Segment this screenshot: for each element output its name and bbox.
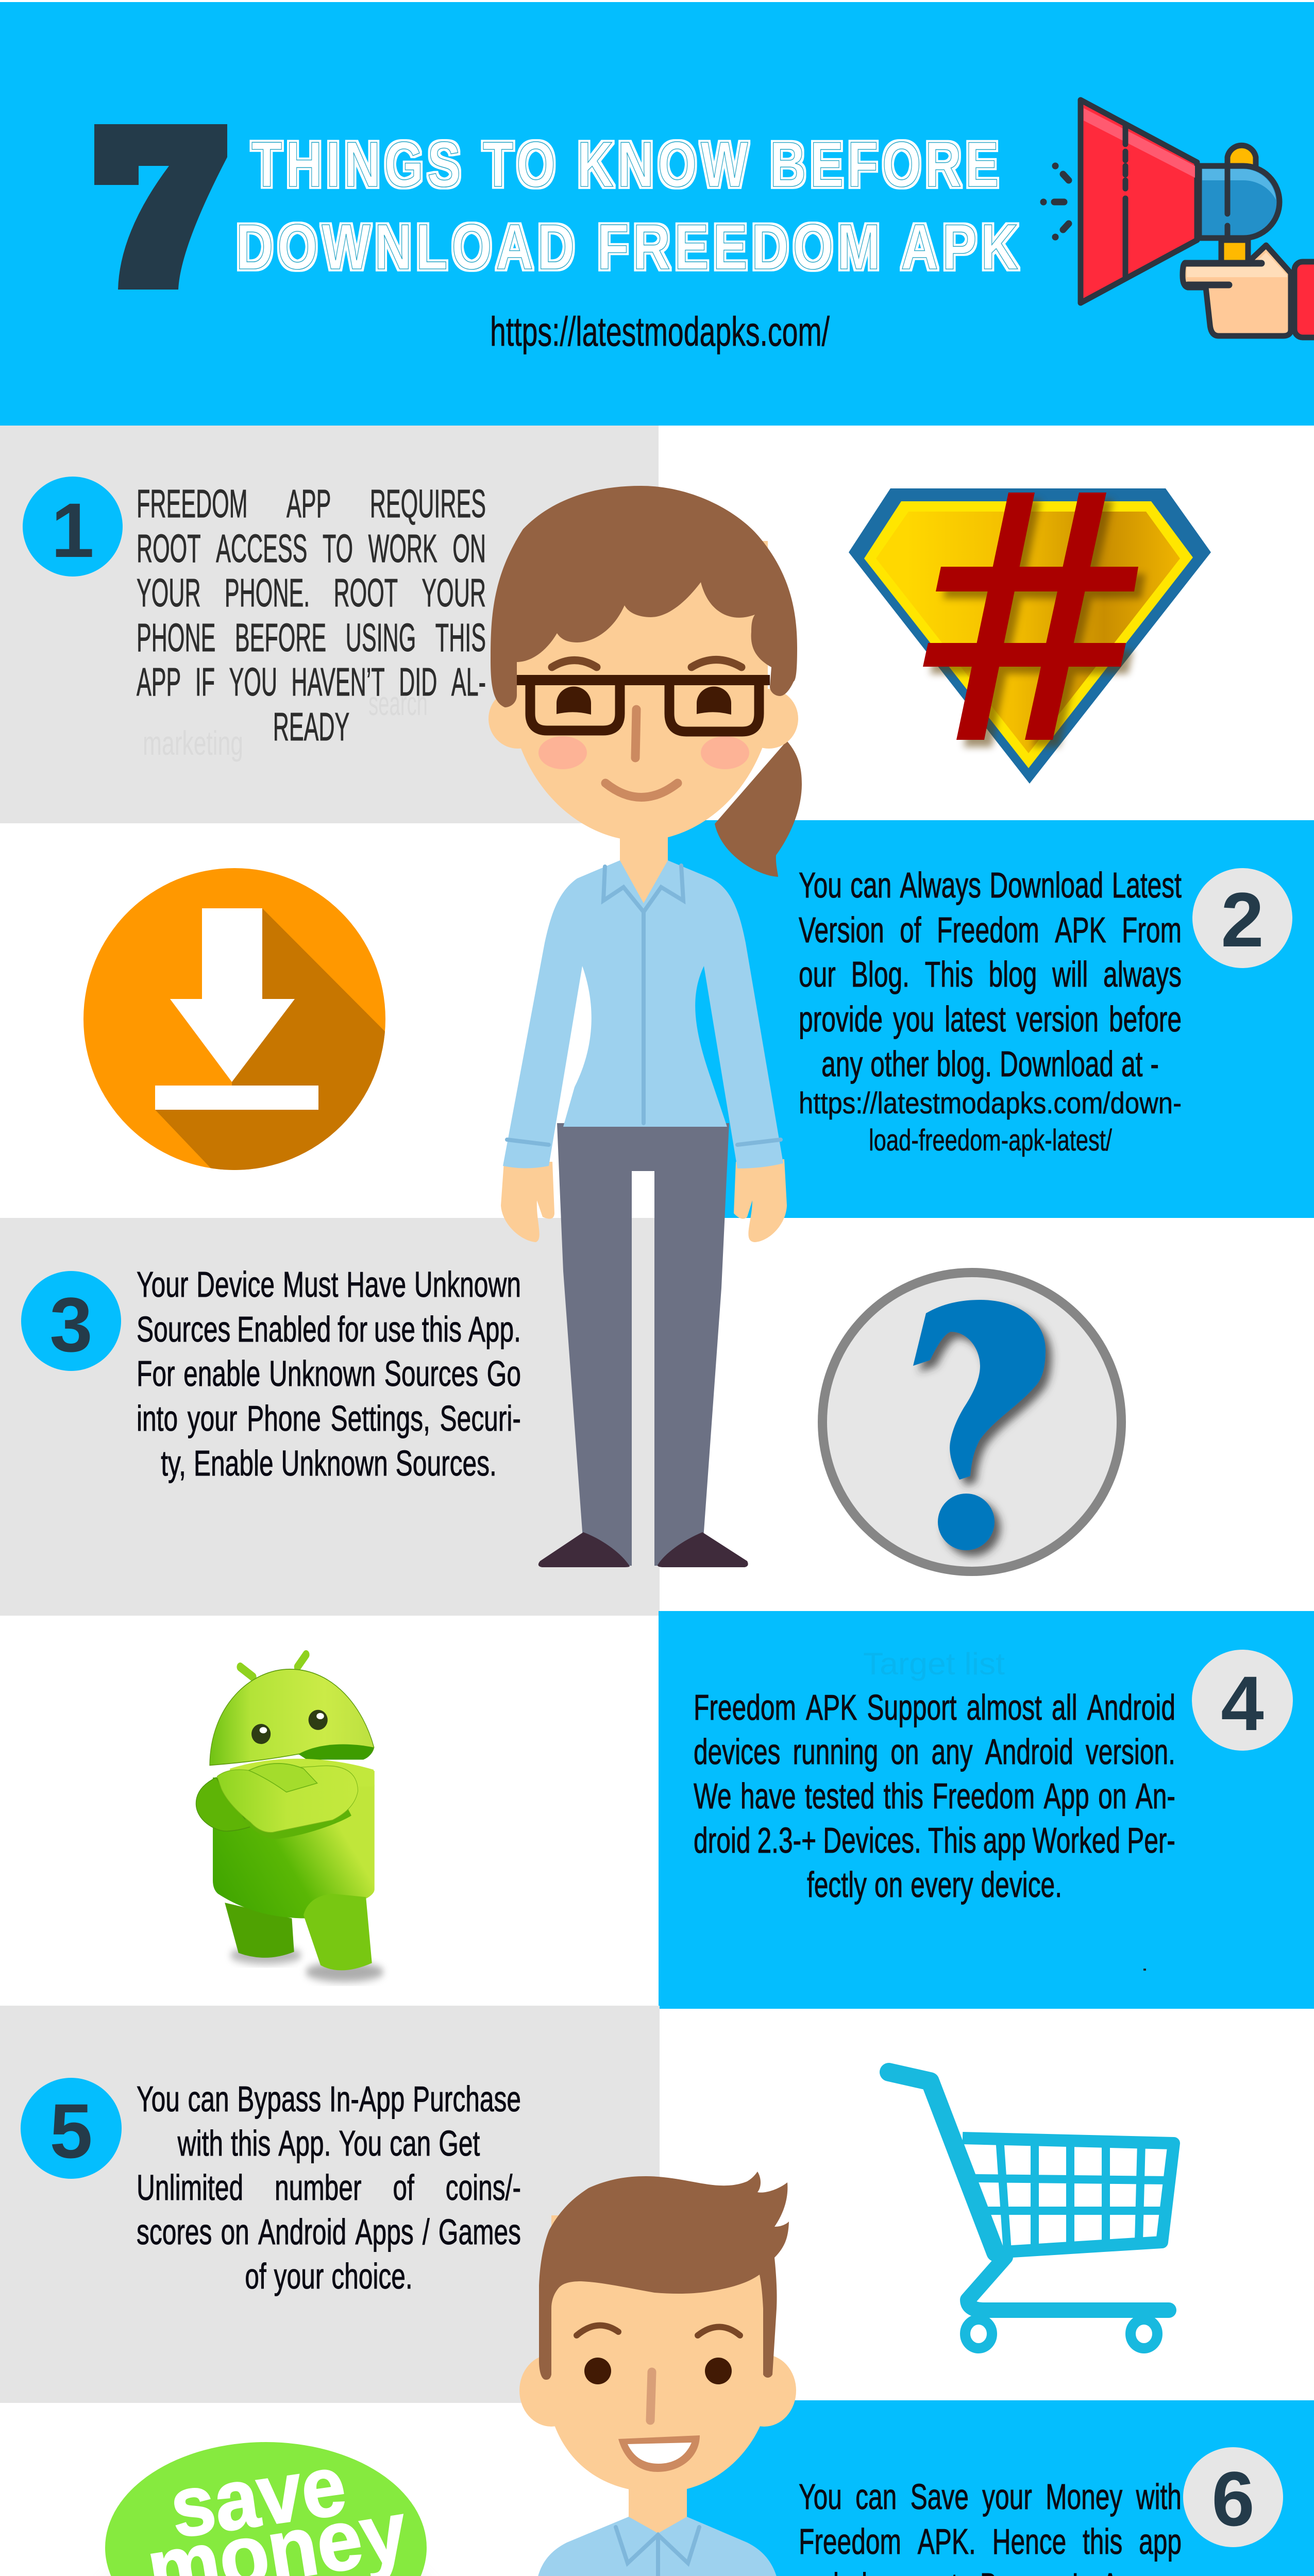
text block: item 6: APK. — [918, 2521, 976, 2562]
text block: item 4: version. — [1086, 1732, 1175, 1772]
text block: item 1: FREEDOM — [137, 482, 248, 526]
text block: item 6: this — [1083, 2521, 1122, 2562]
text block: item 1: PHONE. — [225, 571, 310, 615]
faint ghost words in item 1: search — [368, 684, 428, 722]
badge: number 6 — [1183, 2447, 1283, 2547]
text block: item 3: Device — [196, 1264, 275, 1304]
text block: item 3: use — [374, 1309, 415, 1349]
illustration: woman — [488, 486, 802, 1567]
download url lines: load-freedom-apk-latest/ — [869, 1124, 1113, 1157]
text block: item 1: DID — [399, 660, 437, 704]
text block: item 1: ACCESS — [216, 527, 307, 571]
icon: save money button — [89, 2437, 444, 2576]
panel: item 2 background — [659, 820, 1314, 1218]
text block: item 6: You — [799, 2477, 842, 2517]
text block: item 1: ROOT — [137, 527, 201, 571]
text block: item 3: Unknown — [281, 1443, 388, 1483]
text block: item 2: any — [821, 1044, 863, 1084]
text block: item 4: 2.3-+ — [757, 1820, 816, 1860]
text block: item 2: at — [1121, 1044, 1142, 1084]
badge: number 5: 5 — [49, 2088, 93, 2174]
text block: item 4: any — [932, 1732, 973, 1772]
text block: item 4: Android — [1087, 1687, 1175, 1727]
text block: item 5: choice. — [331, 2256, 413, 2296]
text block: item 3: Unknown — [269, 1353, 376, 1394]
text block: item 5: can — [188, 2079, 229, 2119]
faint ghost word in item 4: Target list — [863, 1647, 1005, 1681]
text block: item 4: Android — [985, 1732, 1073, 1772]
text block: item 4: An- — [1136, 1776, 1175, 1816]
icon: root hash shield — [849, 488, 1211, 784]
text block: item 4: on — [890, 1732, 919, 1772]
text block: item 2: other — [870, 1044, 929, 1084]
text block: item 3: into — [137, 1398, 178, 1438]
text block: item 3 — [137, 1262, 521, 1486]
text block: item 6: your — [982, 2477, 1032, 2517]
text block: item 4: have — [740, 1776, 796, 1816]
icon: shopping cart — [889, 2072, 1174, 2348]
text block: item 5: You — [137, 2079, 180, 2119]
text block: item 5: scores — [137, 2212, 212, 2252]
text block: item 4: app — [983, 1820, 1026, 1860]
text block: item 5: number — [275, 2167, 361, 2208]
text block: item 1: REQUIRES — [370, 482, 486, 526]
text block: item 3: Securi- — [440, 1398, 521, 1438]
text block: item 6: with — [1136, 2477, 1182, 2517]
text block: item 6 — [799, 2475, 1182, 2576]
text block: item 4: running — [793, 1732, 878, 1772]
tiny speck in item 4 — [1143, 1969, 1146, 1971]
badge: number 4 — [1192, 1650, 1293, 1751]
text block: item 3: Unknown — [414, 1264, 521, 1304]
text block: item 4: this — [884, 1776, 923, 1816]
text block: item 5: Android — [258, 2212, 346, 2252]
text block: item 1: PHONE — [137, 615, 215, 659]
text block: item 2 — [799, 865, 1182, 1084]
badge: number 4: 4 — [1221, 1660, 1264, 1747]
text block: item 3: Enable — [194, 1443, 274, 1483]
badge: number 5 — [21, 2078, 122, 2179]
text block: item 1: WORK — [368, 527, 437, 571]
badge: number 1: 1 — [51, 487, 94, 573]
text block: item 4: all — [1052, 1687, 1077, 1727]
text block: item 3: Sources. — [396, 1443, 497, 1483]
text block: item 2: provide — [799, 999, 883, 1039]
badge: number 2: 2 — [1221, 876, 1264, 963]
panel: item 3 background — [0, 1218, 660, 1616]
text block: item 1: AL- — [451, 660, 486, 704]
text block: item 3: Your — [137, 1264, 188, 1304]
text block: item 5: App. — [278, 2123, 331, 2163]
text block: item 4: almost — [966, 1687, 1042, 1727]
text block: item 5: with — [178, 2123, 223, 2163]
illustration: man — [503, 2172, 813, 2576]
text block: item 5: Purchase — [413, 2079, 521, 2119]
text block: item 2: before — [1109, 999, 1182, 1039]
text block: item 1: BEFORE — [235, 615, 326, 659]
text block: item 1: YOUR — [422, 571, 486, 615]
text block: item 2: version — [1016, 999, 1099, 1039]
text block: item 3: Sources — [137, 1309, 230, 1349]
text block: item 4: Per- — [1127, 1820, 1175, 1860]
text block: item 6: Save — [911, 2477, 969, 2517]
text block: item 3: Go — [487, 1353, 521, 1394]
text block: item 4: droid — [694, 1820, 751, 1860]
text block: item 1: READY — [273, 705, 349, 749]
text block: item 5: In-App — [329, 2079, 405, 2119]
badge: number 3 — [21, 1271, 121, 1371]
text block: item 5: your — [274, 2256, 324, 2296]
text block: item 3: Enabled — [237, 1309, 331, 1349]
text block: item 4: fectly — [807, 1865, 867, 1905]
text block: item 2: From — [1122, 910, 1182, 950]
badge: number 1 — [23, 477, 123, 577]
text block: item 4: Freedom — [932, 1776, 1035, 1816]
text block: item 5: on — [221, 2212, 249, 2252]
text block: item 2: - — [1150, 1044, 1159, 1084]
text block: item 3: Phone — [247, 1398, 321, 1438]
text block: item 5: of — [393, 2167, 414, 2208]
text block: item 1: ROOT — [334, 571, 398, 615]
text block: item 2: of — [900, 910, 921, 950]
text block: item 4: tested — [805, 1776, 874, 1816]
text block: item 2: Latest — [1112, 865, 1182, 905]
big number seven — [94, 124, 227, 290]
title line 2: DOWNLOAD FREEDOM APK — [236, 212, 1022, 283]
text block: item 2: Blog. — [851, 954, 909, 994]
text block: item 5: coins/- — [446, 2167, 521, 2208]
text block: item 6: Money — [1046, 2477, 1122, 2517]
text block: item 2: you — [893, 999, 934, 1039]
badge: number 2 — [1192, 868, 1292, 968]
text block: item 1: HAVEN’T — [291, 660, 385, 704]
text block: item 2: Version — [799, 910, 884, 950]
text block: item 1: THIS — [435, 615, 486, 659]
text block: item 2: can — [850, 865, 891, 905]
text block: item 4: APK — [806, 1687, 857, 1727]
text block: item 5: can — [390, 2123, 431, 2163]
panel: item 1 background — [0, 426, 659, 823]
faint ghost words in item 1 — [143, 684, 428, 762]
text block: item 4: Freedom — [694, 1687, 796, 1727]
badge: number 3: 3 — [49, 1281, 93, 1368]
text block: item 3: for — [338, 1309, 367, 1349]
text block: item 3: Sources — [384, 1353, 478, 1394]
text block: item 4: device. — [981, 1865, 1062, 1905]
text block: item 4: on — [874, 1865, 903, 1905]
panel: header band — [0, 2, 1314, 426]
text block: item 6: Hence — [992, 2521, 1066, 2562]
text block: item 2: latest — [945, 999, 1006, 1039]
text block: item 1: YOU — [229, 660, 277, 704]
text block: item 4: Devices. — [823, 1820, 921, 1860]
text block: item 3: ty, — [161, 1443, 186, 1483]
text block: item 4 — [694, 1685, 1175, 1907]
text block: item 2: our — [799, 954, 836, 994]
text block: item 5: this — [231, 2123, 271, 2163]
text block: item 3: your — [188, 1398, 237, 1438]
text block: item 1: USING — [346, 615, 416, 659]
text block: item 2: This — [925, 954, 973, 994]
text block: item 4: We — [694, 1776, 732, 1816]
text block: item 1 — [136, 482, 486, 749]
title line 1: THINGS TO KNOW BEFORE — [251, 129, 1003, 200]
text block: item 2: Always — [900, 865, 981, 905]
text block: item 5: / — [423, 2212, 430, 2252]
download url lines — [799, 1087, 1182, 1157]
text block: item 2: Download — [989, 865, 1103, 905]
text block: item 6: can — [855, 2477, 897, 2517]
text block: item 3: Have — [346, 1264, 406, 1304]
icon: green android robot — [196, 1655, 384, 1982]
icon: megaphone with hand — [1043, 100, 1314, 337]
text block: item 6: app — [1139, 2521, 1182, 2562]
text block: item 4: This — [928, 1820, 976, 1860]
icon: question mark circle — [822, 1273, 1121, 1571]
text block: item 3: App. — [468, 1309, 521, 1349]
panel: item 5 background — [0, 2006, 660, 2403]
text block: item 5: Bypass — [237, 2079, 321, 2119]
text block: item 1: YOUR — [137, 571, 201, 615]
text block: item 5: Get — [439, 2123, 480, 2163]
text block: item 2: blog — [988, 954, 1037, 994]
text block: item 4: Support — [867, 1687, 956, 1727]
text block: item 5: Games — [439, 2212, 521, 2252]
text block: item 1: IF — [195, 660, 215, 704]
text block: item 3: enable — [183, 1353, 260, 1394]
icon: save money button: save — [164, 2437, 351, 2555]
text block: item 2: Freedom — [937, 910, 1039, 950]
text block: item 4: every — [911, 1865, 973, 1905]
text block: item 3: For — [137, 1353, 175, 1394]
text block: item 2: APK — [1055, 910, 1106, 950]
panel: item 6 background — [659, 2400, 1314, 2576]
badge: number 6: 6 — [1211, 2455, 1255, 2542]
text block: item 4: App — [1043, 1776, 1089, 1816]
text block: item 2: Download — [1000, 1044, 1114, 1084]
text block: item 2: always — [1103, 954, 1182, 994]
text block: item 2: blog. — [936, 1044, 992, 1084]
text block: item 4: Worked — [1033, 1820, 1120, 1860]
text block: item 1: APP — [137, 660, 181, 704]
text block: item 5: You — [339, 2123, 382, 2163]
text block: item 5: Unlimited — [137, 2167, 243, 2208]
text block: item 3: Must — [283, 1264, 338, 1304]
faint ghost words in item 1: marketing — [143, 724, 243, 762]
icon: orange download circle — [83, 868, 386, 1185]
text block: item 3: this — [422, 1309, 462, 1349]
text block: item 4: on — [1098, 1776, 1126, 1816]
text block: item 4: devices — [694, 1732, 781, 1772]
text block: item 5 — [137, 2077, 521, 2298]
text block: item 1: TO — [323, 527, 353, 571]
text block: item 5: Apps — [355, 2212, 414, 2252]
text block: item 1: APP — [287, 482, 331, 526]
text block: item 3: Settings, — [330, 1398, 430, 1438]
text block: item 5: of — [245, 2256, 266, 2296]
text block: item 2: You — [799, 865, 842, 905]
text block: item 6: Freedom — [799, 2521, 901, 2562]
text block: item 2: will — [1052, 954, 1088, 994]
text block: item 1: ON — [452, 527, 486, 571]
panel: item 4 background — [659, 1611, 1314, 2009]
website url: https://latestmodapks.com/ — [490, 309, 830, 354]
download url lines: https://latestmodapks.com/down- — [799, 1087, 1182, 1120]
